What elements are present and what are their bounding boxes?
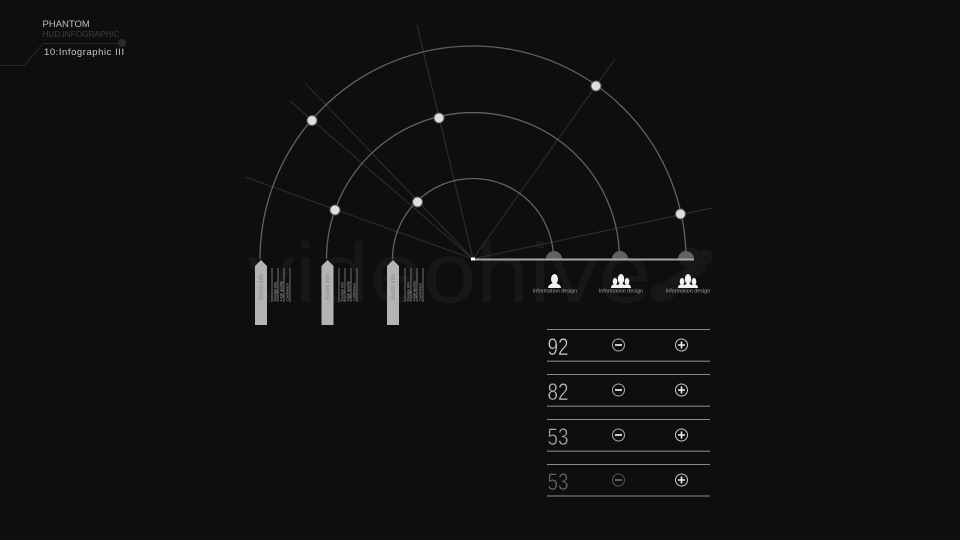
watermark: videohive: [247, 226, 652, 320]
icon: plus: [676, 339, 688, 351]
pointer tag 1: Bullet info: [259, 273, 265, 300]
value: 53: [548, 424, 568, 451]
pointer tag 3: Bullet info: [391, 273, 397, 300]
stat row 3: [547, 419, 710, 452]
header: [0, 19, 126, 66]
pointer tag 1: Design info: [274, 282, 278, 301]
value: 82: [548, 379, 568, 406]
section label: 10:Infographic III: [44, 47, 125, 58]
pointer tag 3: Customize: [418, 283, 422, 301]
pointer tag 3: Design info: [406, 282, 410, 301]
arc end caps: [546, 251, 694, 259]
stat row 1: [547, 329, 710, 362]
icon: plus: [676, 474, 688, 486]
data nodes: [307, 81, 686, 219]
icon: group: [678, 274, 698, 288]
arcs: [260, 46, 686, 259]
pointer tag 3: High quality: [412, 281, 416, 301]
label: information design 3: Information design: [666, 288, 710, 294]
spokes: [245, 25, 712, 259]
pointer tag 2: Design info: [340, 282, 344, 301]
label: information design 1: Information design: [533, 288, 577, 294]
pointer tag 1: High quality: [280, 281, 284, 301]
pointer tag 1: Customize: [286, 283, 290, 301]
pointer tag 3: [387, 260, 423, 325]
pointer tag 2: High quality: [346, 281, 350, 301]
subtitle: HUD.INFOGRAPHIC: [42, 30, 119, 39]
icon: minus: [612, 429, 624, 441]
centre point: [471, 258, 475, 260]
icon: plus: [676, 384, 688, 396]
pointer tag 2: Customize: [352, 283, 356, 301]
stat row 4: [547, 464, 710, 497]
title: PHANTOM: [42, 19, 90, 30]
value: 92: [548, 334, 568, 361]
value: 53: [548, 469, 568, 496]
stat row 2: [547, 374, 710, 407]
pointer tag 1: [255, 260, 290, 325]
label: information design 2: Information design: [599, 288, 643, 294]
icon: single person: [548, 274, 561, 288]
icon: watermark leaf: [651, 247, 713, 302]
icon: group: [611, 274, 631, 288]
pointer tag 2: [322, 260, 357, 325]
radial chart: [245, 25, 712, 260]
icon: minus: [612, 474, 624, 486]
baseline: [473, 258, 694, 260]
icon: minus: [612, 384, 624, 396]
icon: minus: [612, 339, 624, 351]
icon: plus: [676, 429, 688, 441]
pointer tag 2: Bullet info: [326, 273, 332, 300]
